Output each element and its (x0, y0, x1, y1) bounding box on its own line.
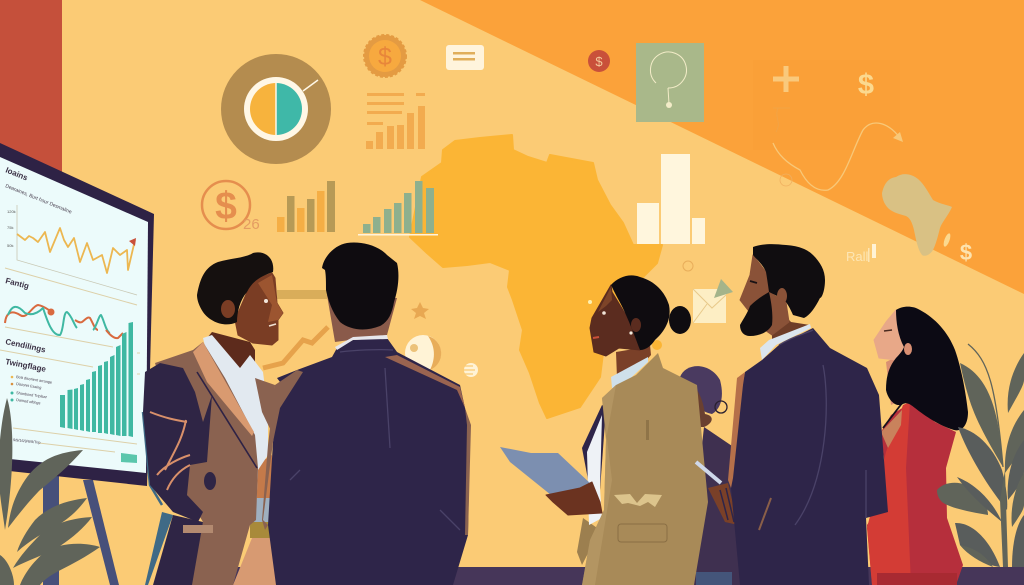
chart legend (10, 375, 52, 405)
neck (772, 302, 810, 342)
small label with bars (846, 244, 876, 264)
cuff highlight (614, 494, 662, 507)
icon: dollar coin with number: $ (215, 185, 237, 228)
lapel (881, 410, 902, 448)
bar chart orange and olive (277, 181, 335, 232)
ear (777, 288, 787, 304)
screen footer lines (13, 428, 137, 452)
woman in red suit (867, 307, 968, 585)
face (740, 255, 789, 335)
chart legend: Shanbond Triplaar (16, 391, 48, 399)
hair (197, 252, 273, 324)
orange accent behind woman (652, 340, 662, 350)
sleeve highlights (150, 412, 190, 490)
collar (760, 324, 811, 360)
navy jacket (731, 328, 888, 585)
tan jacket (582, 353, 708, 585)
dark coat lower (153, 515, 203, 585)
screen heading: Ioains (4, 166, 30, 183)
donut chart (221, 54, 331, 164)
woman with tan jacket and folder (500, 275, 708, 585)
pen (696, 462, 721, 483)
trend arrow curve (773, 108, 903, 190)
icon: dollar badge (364, 35, 406, 77)
rising trend line (263, 327, 328, 368)
white shirt (587, 415, 602, 525)
beige bar behind heads (277, 290, 327, 299)
jacket seams (779, 330, 866, 525)
orange diagonal panel (420, 0, 1024, 294)
screen button (121, 453, 137, 463)
chart legend: Damed oftings (16, 398, 41, 405)
shoulder highlight (385, 355, 465, 408)
face (682, 378, 712, 427)
icon: dollar badge: $ (378, 43, 392, 71)
face (235, 273, 283, 345)
teal bar chart (60, 322, 133, 437)
face highlight (258, 275, 283, 322)
jacket pocket (183, 525, 213, 533)
faint panel on orange (753, 60, 900, 150)
icon: dollar coin with number (202, 181, 260, 233)
icon: small leaf (942, 233, 952, 247)
floor band (200, 567, 1024, 585)
screen label conditions: Cendilings (5, 337, 47, 355)
man with brown jacket (143, 252, 283, 585)
neck (327, 295, 397, 342)
line chart: 50k (7, 243, 13, 248)
line chart: 120k (7, 209, 16, 214)
red wall panel (0, 0, 62, 180)
body (687, 427, 742, 585)
icon: red dollar dot: $ (595, 54, 603, 69)
wave lines chart (5, 305, 123, 338)
lower shirt (253, 498, 272, 524)
hand (546, 482, 602, 515)
folder (500, 447, 592, 495)
icon: red dollar dot (588, 50, 610, 72)
lapel line (197, 372, 257, 468)
icon: speed lines (461, 363, 478, 377)
left brown edge (262, 370, 303, 530)
screen surface (0, 157, 148, 473)
hair (611, 275, 670, 350)
hair (753, 244, 825, 318)
neck (886, 352, 906, 405)
icon: cream ball (405, 335, 441, 371)
earring (715, 401, 727, 413)
icon: faint globe (683, 261, 693, 271)
elbow fold (204, 472, 216, 490)
trousers (233, 538, 282, 585)
earring (629, 331, 633, 335)
face (874, 310, 906, 360)
forehead light (598, 287, 612, 312)
sleeve edge (143, 412, 162, 505)
screen label forecasting: Fantig (5, 276, 30, 291)
small bar chart with text lines (366, 93, 425, 149)
cuff stripes (720, 488, 734, 522)
mouth (269, 324, 276, 326)
plant left (0, 398, 100, 585)
screen label trading: Twingflage (5, 357, 47, 374)
small label with bars: Rall (846, 249, 869, 264)
lanyard (883, 398, 906, 428)
eye (884, 330, 892, 331)
man seen from behind (262, 242, 471, 585)
icon: dollar coin with number: 26 (243, 216, 260, 233)
right edge (465, 408, 471, 535)
screen rule (5, 268, 137, 305)
trouser band (877, 573, 957, 585)
icon: message card (446, 45, 484, 70)
head (680, 366, 722, 414)
person in background with hoop earring (680, 366, 742, 585)
face (590, 285, 640, 356)
beard (740, 292, 772, 336)
ear (631, 318, 641, 332)
neck (616, 345, 651, 378)
sleeve seam (646, 420, 649, 440)
screen subheading: Dearaines, Burt hour Desmaline (4, 183, 73, 216)
midriff skin (256, 455, 272, 498)
jeans (696, 572, 732, 585)
pocket (618, 524, 667, 542)
presentation screen (0, 143, 154, 486)
icon: envelope with arrow (693, 279, 733, 323)
bar chart green (358, 181, 438, 236)
ear (221, 300, 235, 318)
icon: plus (773, 66, 799, 92)
neck (207, 332, 255, 375)
vent detail (759, 498, 771, 530)
screen rules (0, 327, 140, 374)
hair (322, 242, 398, 329)
icon: dollar on orange: $ (858, 69, 874, 101)
mouth (593, 337, 599, 338)
icon: dollar near map: $ (960, 240, 972, 265)
dark lining (582, 405, 606, 490)
eye (264, 299, 268, 303)
green card with magnifier (636, 43, 704, 122)
jacket left edge (728, 372, 745, 488)
shirt (203, 335, 268, 522)
eye (602, 311, 606, 315)
chart legend: Distoret Essing (16, 382, 42, 390)
jacket body (155, 342, 258, 585)
icon: star (411, 302, 429, 319)
africa map small (882, 174, 952, 256)
collar white (335, 335, 388, 350)
line chart: 75k (7, 225, 13, 230)
screen stand (43, 470, 119, 585)
screen footer text: 9/9/16/9/6/9/Trip (13, 438, 41, 445)
ear (904, 343, 912, 355)
jacket (268, 338, 470, 585)
red jacket light front (867, 402, 911, 585)
plant right (937, 344, 1024, 567)
belt (250, 522, 272, 538)
red jacket (867, 402, 963, 585)
icon: yellow dot (588, 300, 592, 304)
coat flap (577, 518, 600, 565)
jacket light side (582, 385, 616, 585)
blue coat edge (145, 512, 173, 585)
line chart (7, 205, 137, 295)
dark sleeve (143, 363, 212, 522)
hair bun (669, 306, 691, 334)
man with beard (696, 244, 888, 585)
collar and seams (290, 350, 460, 530)
jacket right panel (255, 378, 275, 435)
chart legend: Bott disorient arrange (16, 375, 52, 385)
screen frame (0, 143, 154, 486)
hair (886, 307, 968, 430)
africa map large (410, 135, 662, 418)
eye (750, 281, 757, 283)
hand (708, 483, 738, 525)
shirt collar (611, 357, 648, 388)
collar (193, 342, 254, 436)
cream bar chart (637, 154, 705, 244)
